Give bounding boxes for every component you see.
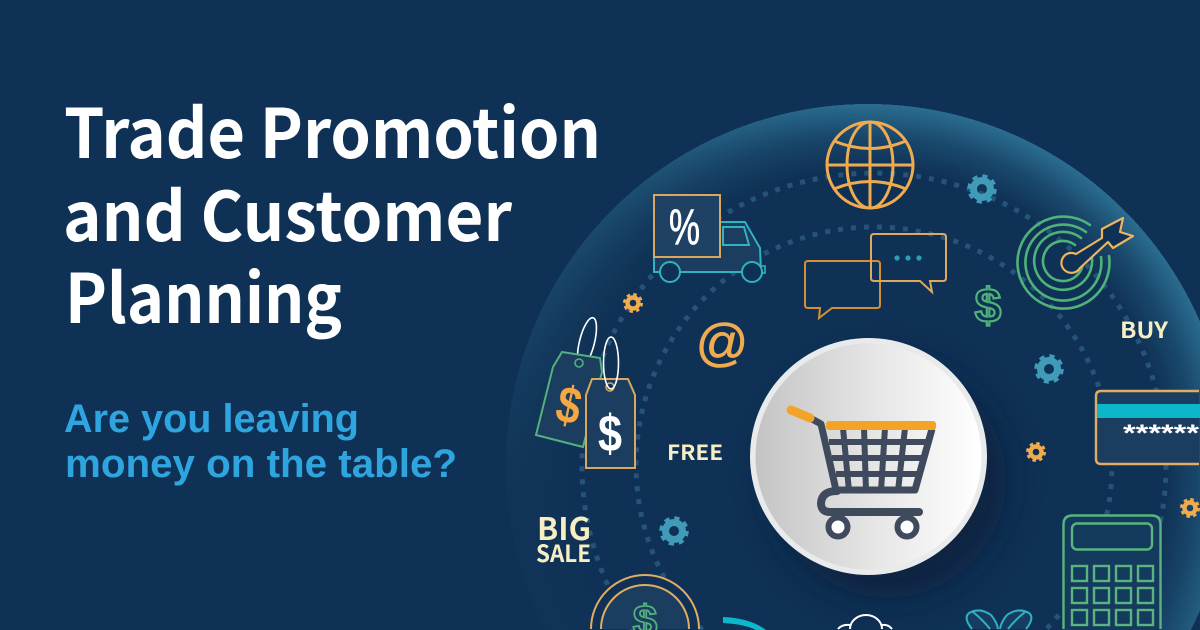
- icon: teal gear lower: [661, 518, 687, 544]
- icon: teal leaves: [967, 610, 1031, 629]
- dashed orbit rings: [582, 173, 1166, 630]
- icon: shopping cart: [791, 410, 936, 536]
- icon: delivery truck with percent box: [654, 195, 765, 282]
- title: [63, 79, 601, 343]
- icon: orange speech bubble: [805, 261, 880, 318]
- icon: dollar coin: [591, 575, 699, 630]
- icon: price tags: $: [551, 375, 587, 437]
- label: BIG SALE: SALE: [536, 535, 591, 569]
- icon: light speech bubble with dots: [871, 234, 946, 292]
- icon: globe: [827, 122, 913, 208]
- icon: green dollar sign: $: [975, 280, 1002, 333]
- icon: orange gear far right: [1181, 499, 1199, 517]
- label: BIG SALE: [536, 504, 591, 569]
- icon: delivery truck with percent box: %: [669, 199, 700, 255]
- title: and Customer: [63, 162, 512, 261]
- central white disc with shopping cart: [750, 338, 987, 575]
- central disc shadow: [770, 362, 1006, 598]
- icon: orange gear centre right: [1027, 443, 1045, 461]
- icon: at sign: @: [696, 314, 748, 372]
- title: Trade Promotion: [64, 79, 601, 178]
- icon: credit card: [1096, 391, 1200, 464]
- icon: orange gear left: [624, 294, 642, 312]
- icon: teal gear right: [1036, 356, 1062, 382]
- subtitle: Are you leaving: [64, 397, 359, 441]
- label: FREE: FREE: [667, 437, 723, 467]
- icon: price tags: $: [598, 405, 622, 463]
- label: BUY: BUY: [1120, 313, 1168, 345]
- label: BIG SALE: BIG: [537, 504, 591, 549]
- icon: calculator: [1064, 516, 1160, 630]
- icon: price tags: [536, 316, 635, 468]
- icon: white cloud: [838, 615, 892, 629]
- title: Planning: [65, 244, 342, 343]
- icon: teal arc: [723, 617, 766, 630]
- icon: target with arrow: [1017, 217, 1133, 309]
- icon: teal gear top: [969, 176, 995, 202]
- subtitle: [64, 397, 457, 486]
- subtitle: money on the table?: [65, 442, 457, 486]
- icon: credit card: ******: [1123, 420, 1200, 447]
